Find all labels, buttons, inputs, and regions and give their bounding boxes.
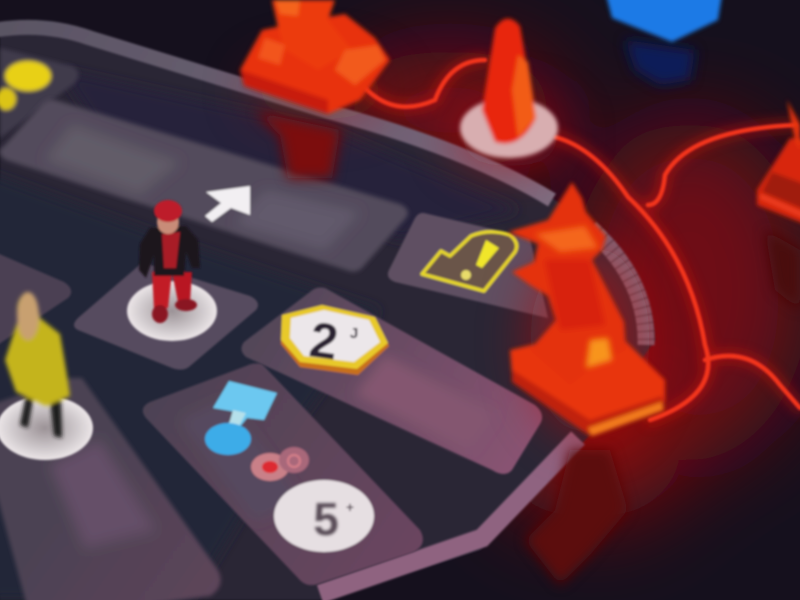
- reflection: red tower: [256, 112, 340, 178]
- piece: red cone on disc: [460, 18, 558, 158]
- piece: blue cube: [606, 0, 722, 42]
- icon: 5+ token: [274, 480, 374, 552]
- icon: white arrow: [205, 186, 250, 222]
- torso: [139, 226, 200, 278]
- icon: hexagon number badge: 2: [306, 311, 342, 371]
- icon: blue flag shape: [205, 381, 277, 455]
- piece: red figure: [127, 200, 217, 341]
- piece: yellow coat figure: [0, 292, 93, 460]
- board surface: [0, 24, 655, 600]
- icon: hexagon number badge: [281, 305, 389, 375]
- panel: arrow card: [0, 100, 408, 272]
- stand: [0, 396, 93, 460]
- icon: heart token: [251, 447, 309, 481]
- piece: red block right: [757, 100, 800, 226]
- panel: hexagon card: [241, 288, 542, 474]
- reflection: dragon: [525, 450, 628, 585]
- panel: top-left corner card: [0, 48, 79, 138]
- glowing wires: [365, 60, 800, 420]
- piece: red dragon figure: [508, 182, 665, 436]
- icon: hexagon number badge: J: [350, 325, 358, 342]
- icon: 5+ token: +: [346, 499, 354, 515]
- panel: alert card: [388, 213, 548, 318]
- icon: 5+ token: 5: [313, 493, 339, 545]
- board border track: [0, 27, 646, 594]
- red glow over board edge: [250, 60, 650, 435]
- head: [157, 210, 179, 234]
- panel: blue icon card: [143, 363, 423, 585]
- piece: blue cube shadow: [625, 40, 695, 85]
- legs: [152, 272, 172, 308]
- panel: bottom-left card: [0, 378, 221, 600]
- piece: red tower top: [240, 0, 390, 114]
- stand: [127, 281, 217, 341]
- icon: yellow token: [5, 61, 51, 91]
- red ambient glow: [340, 50, 800, 520]
- panel: player card: [74, 264, 258, 370]
- panel: left edge card: [0, 250, 71, 350]
- reflection: block: [765, 230, 800, 310]
- icon: yellow alert outline: [422, 232, 517, 291]
